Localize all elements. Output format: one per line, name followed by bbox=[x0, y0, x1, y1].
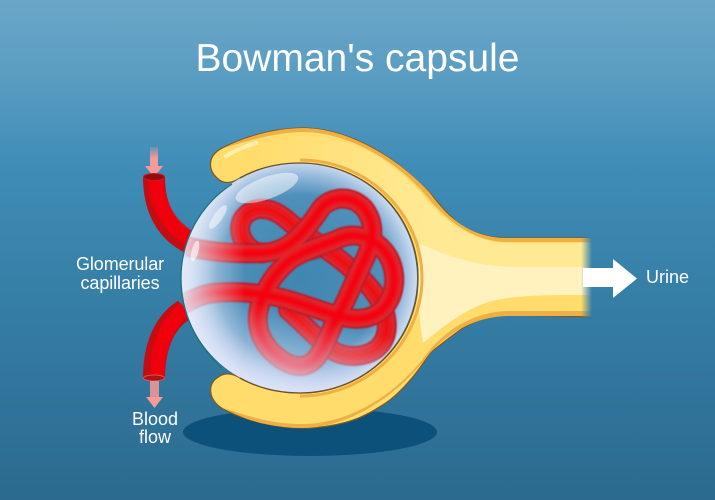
afferent vessel bbox=[144, 174, 194, 244]
shadow bbox=[183, 408, 437, 456]
label: Glomerular capillaries: Glomerular bbox=[76, 254, 164, 274]
label: Blood flow: flow bbox=[139, 427, 172, 447]
capsule bbox=[210, 128, 595, 428]
sphere outline bbox=[181, 184, 232, 368]
label: Blood flow: Blood bbox=[132, 409, 178, 429]
label: Glomerular capillaries: capillaries bbox=[81, 273, 160, 293]
capsule wall bbox=[210, 128, 595, 428]
arrow: urine out bbox=[583, 259, 637, 298]
sphere highlights bbox=[232, 166, 302, 210]
label: Urine: Urine bbox=[646, 267, 689, 287]
capsule tip highlights bbox=[226, 143, 256, 156]
overlap shadow bbox=[310, 256, 321, 261]
glass sphere bbox=[181, 163, 418, 393]
icon: outgoing blood flow arrow bbox=[146, 381, 163, 408]
icon: incoming blood flow arrow bbox=[145, 147, 163, 177]
efferent vessel bbox=[144, 308, 185, 381]
sphere glass veil bbox=[181, 163, 417, 393]
capillary tuft bbox=[181, 198, 394, 366]
sphere body bbox=[181, 163, 417, 393]
title: Bowman's capsule bbox=[196, 37, 519, 80]
